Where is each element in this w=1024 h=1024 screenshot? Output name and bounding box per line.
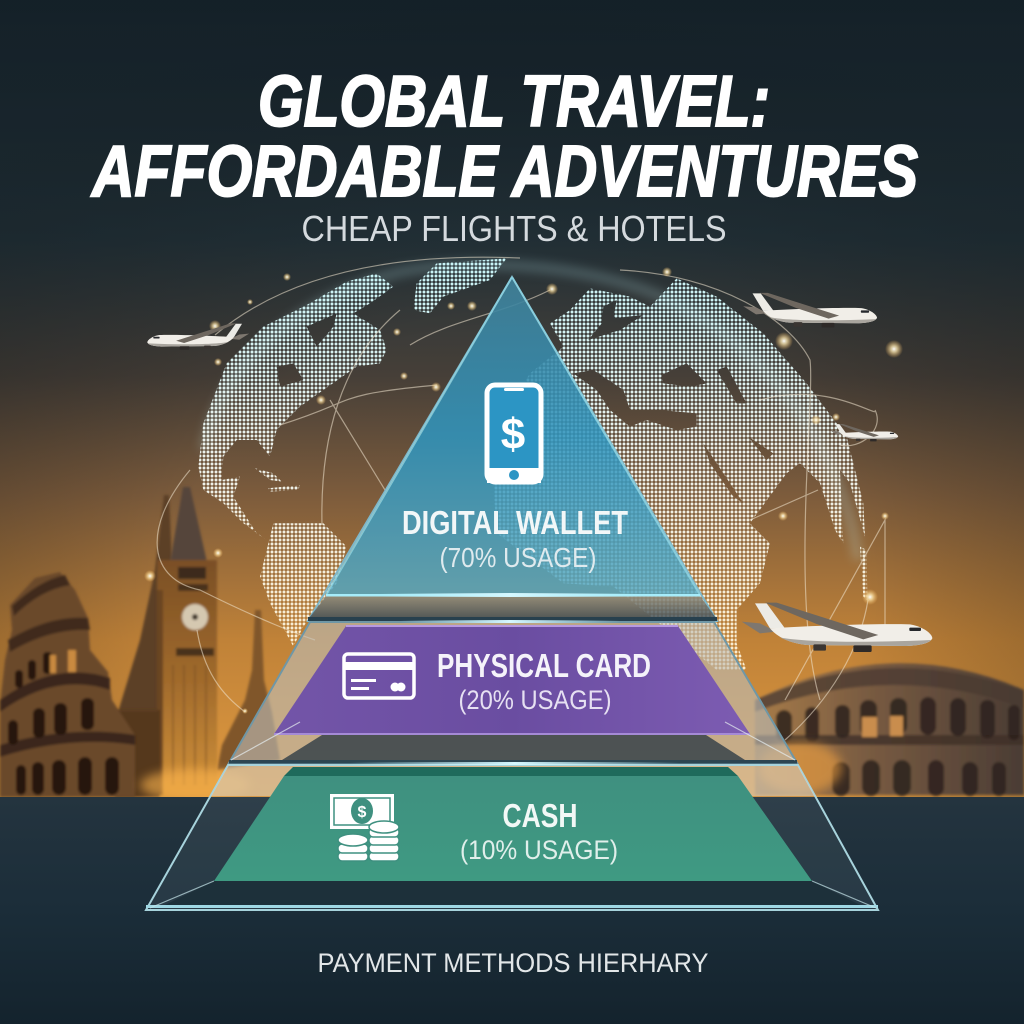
tier 2: physical card: [229, 620, 797, 764]
title: [90, 62, 918, 212]
side vignette: [0, 0, 1024, 800]
landmark: Eiffel tower left: [118, 495, 172, 712]
tier 3: cash: [146, 762, 878, 910]
tier 1: digital wallet: [308, 277, 717, 621]
label: physical card: (20% USAGE): [458, 685, 612, 715]
icon: credit card: [344, 654, 414, 698]
tier 3 green face: [214, 776, 812, 881]
plane: top left: [147, 323, 249, 350]
background sky: [0, 0, 1024, 800]
landmark: Colosseum left: [0, 572, 135, 797]
tier 2 light edges: [229, 760, 797, 764]
label: physical card: [437, 647, 651, 715]
tier 1 glass: [308, 277, 717, 621]
tier 3 base light: [146, 905, 878, 908]
footer caption: PAYMENT METHODS HIERHARY: [318, 948, 708, 978]
tier 1 light edges: [326, 277, 700, 595]
label: digital wallet: (70% USAGE): [440, 542, 596, 573]
dotted continents: [198, 258, 868, 670]
subtitle: CHEAP FLIGHTS & HOTELS: [302, 208, 726, 249]
icon: phone with dollar: $: [501, 410, 525, 459]
floor: [0, 797, 1024, 1024]
landmark: Eiffel tower small: [217, 610, 280, 770]
label: digital wallet: DIGITAL WALLET: [402, 504, 628, 541]
globe limb glow: [204, 265, 858, 560]
label: cash: [460, 797, 618, 865]
tier 2 purple face: [274, 626, 750, 734]
city glow left: [140, 769, 250, 801]
tier 3 dark shelf: [165, 881, 860, 905]
label: digital wallet: [402, 504, 628, 573]
tier 3 glass: [146, 765, 878, 910]
tier 1 glass band: [309, 596, 716, 618]
tier 3 dark top strip: [284, 767, 738, 776]
label: physical card: PHYSICAL CARD: [437, 647, 651, 684]
label: cash: (10% USAGE): [460, 835, 618, 865]
label: cash: CASH: [502, 797, 578, 834]
plane: top right: [743, 293, 877, 328]
landmark: Colosseum right: [755, 663, 1024, 796]
tier 2 dark shelf: [282, 735, 745, 760]
icon: cash and coins: [330, 794, 399, 861]
plane: large right: [742, 603, 932, 652]
globe: [197, 256, 868, 670]
tier 3 upper glass above horizon: [211, 766, 815, 796]
flight network lines: [157, 257, 885, 740]
city glow right: [758, 742, 842, 794]
plane: small right: [831, 424, 898, 441]
landmark: Big Ben: [115, 487, 217, 797]
title: GLOBAL TRAVEL:: [258, 62, 770, 142]
pyramid: [146, 277, 878, 910]
tier 1 blue face: [326, 279, 700, 595]
icon: cash and coins: $: [358, 804, 367, 821]
network nodes: [144, 267, 903, 714]
tier 2 glass: [229, 622, 797, 763]
icon: phone with dollar: [487, 385, 541, 483]
